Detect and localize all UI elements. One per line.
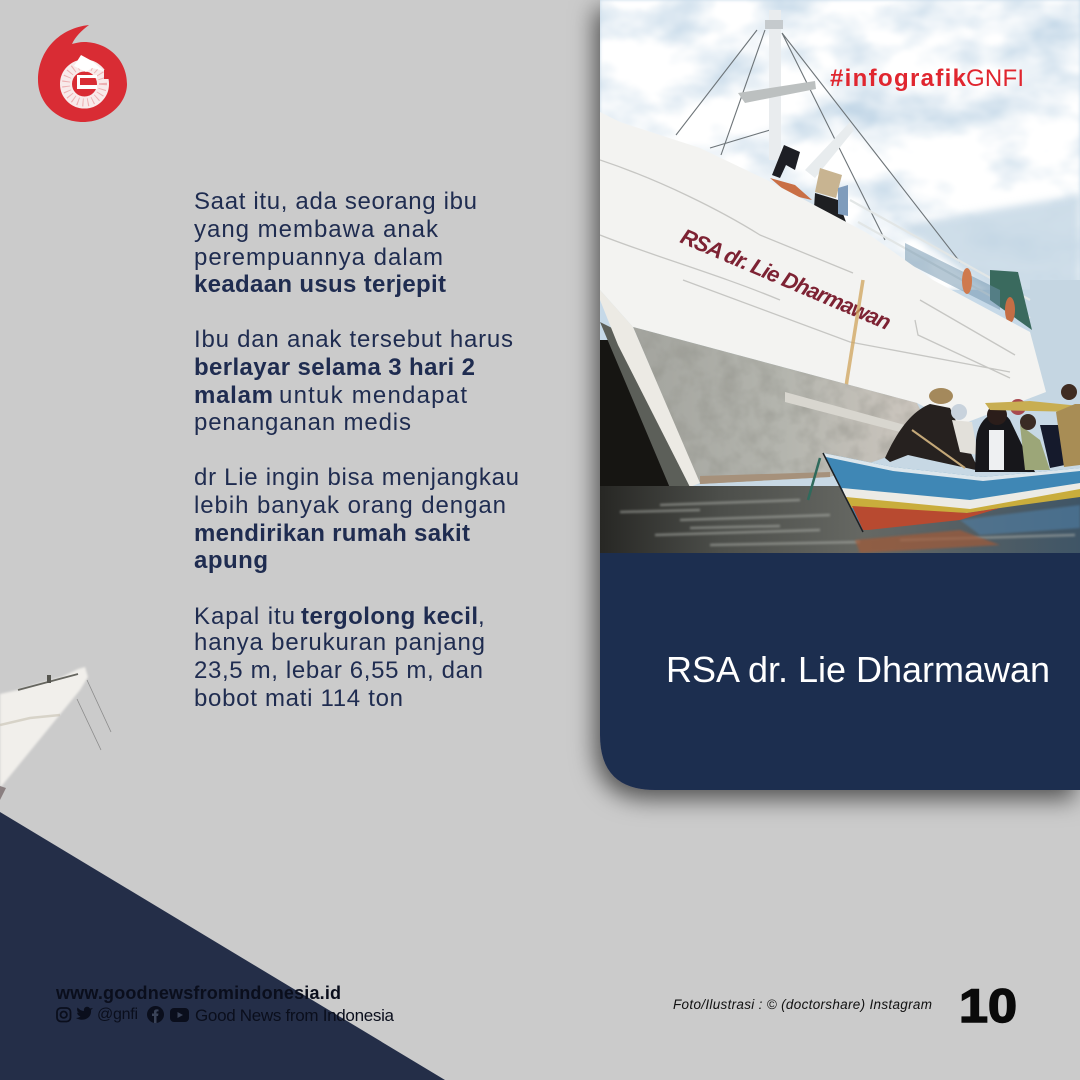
body text: paragraph 4: tergolong kecil xyxy=(301,603,478,630)
ship hull grey lower xyxy=(633,327,935,484)
body text: paragraph 2: malam xyxy=(194,382,273,409)
icon: youtube xyxy=(170,1008,189,1022)
photo credit: Foto/Ilustrasi : © (doctorshare) Instagram xyxy=(673,997,932,1012)
body text: paragraph 1: yang membawa anak xyxy=(194,216,439,243)
body text: paragraph 4: bobot mati 114 ton xyxy=(194,685,403,712)
icon: instagram xyxy=(57,1008,70,1022)
body text: paragraph 1 xyxy=(194,188,477,298)
body text: paragraph 2: penanganan medis xyxy=(194,409,411,436)
body text: paragraph 3: dr Lie ingin bisa menjangkau xyxy=(194,464,519,491)
body text: paragraph 4: 23,5 m, lebar 6,55 m, dan xyxy=(194,657,483,684)
body text: paragraph 1: Saat itu, ada seorang ibu xyxy=(194,188,477,215)
logo: GNFI red swirl xyxy=(38,25,127,122)
body text: paragraph 4: , xyxy=(478,603,485,630)
body text: paragraph 2: Ibu dan anak tersebut harus xyxy=(194,326,513,353)
body text: paragraph 1: perempuannya dalam xyxy=(194,244,443,271)
photo: hospital ship with small boat xyxy=(600,0,1080,553)
decorative ship bow at left edge xyxy=(0,667,111,800)
body text: paragraph 1: keadaan usus terjepit xyxy=(194,271,446,298)
icon: twitter xyxy=(76,1007,93,1020)
hashtag: GNFI xyxy=(966,65,1024,92)
page number: 10 xyxy=(959,979,1017,1032)
ship name painted on hull: RSA dr. Lie Dharmawan xyxy=(677,224,895,335)
hashtag: #infografik xyxy=(830,65,967,92)
water xyxy=(600,486,1080,553)
body text: paragraph 3: mendirikan rumah sakit xyxy=(194,520,470,547)
body text: paragraph 4 xyxy=(194,603,485,712)
footer: website and social handles xyxy=(55,983,395,1025)
body text: paragraph 4: Kapal itu xyxy=(194,603,295,630)
body text: paragraph 2 xyxy=(194,326,513,436)
panel background xyxy=(600,0,1080,790)
people on boat xyxy=(885,384,1080,472)
dark area under ship xyxy=(600,340,670,486)
facebook and youtube name: Good News from Indonesia xyxy=(195,1006,395,1025)
body text: paragraph 3: lebih banyak orang dengan xyxy=(194,492,506,519)
social handle: @gnfi xyxy=(97,1006,138,1023)
ship hull white upper xyxy=(600,112,1046,425)
panel title: RSA dr. Lie Dharmawan xyxy=(666,649,1050,690)
body text: paragraph 3 xyxy=(194,464,519,574)
body text: paragraph 2: untuk mendapat xyxy=(279,382,467,409)
icon: facebook xyxy=(147,1006,164,1023)
website url: www.goodnewsfromindonesia.id xyxy=(55,983,341,1003)
panel: photo and title card xyxy=(600,0,1080,790)
body text: paragraph 2: berlayar selama 3 hari 2 xyxy=(194,354,475,381)
small wooden boat xyxy=(808,453,1080,532)
body text: paragraph 3: apung xyxy=(194,547,268,574)
body text: paragraph 4: hanya berukuran panjang xyxy=(194,629,485,656)
navy triangle bottom left xyxy=(0,812,445,1080)
